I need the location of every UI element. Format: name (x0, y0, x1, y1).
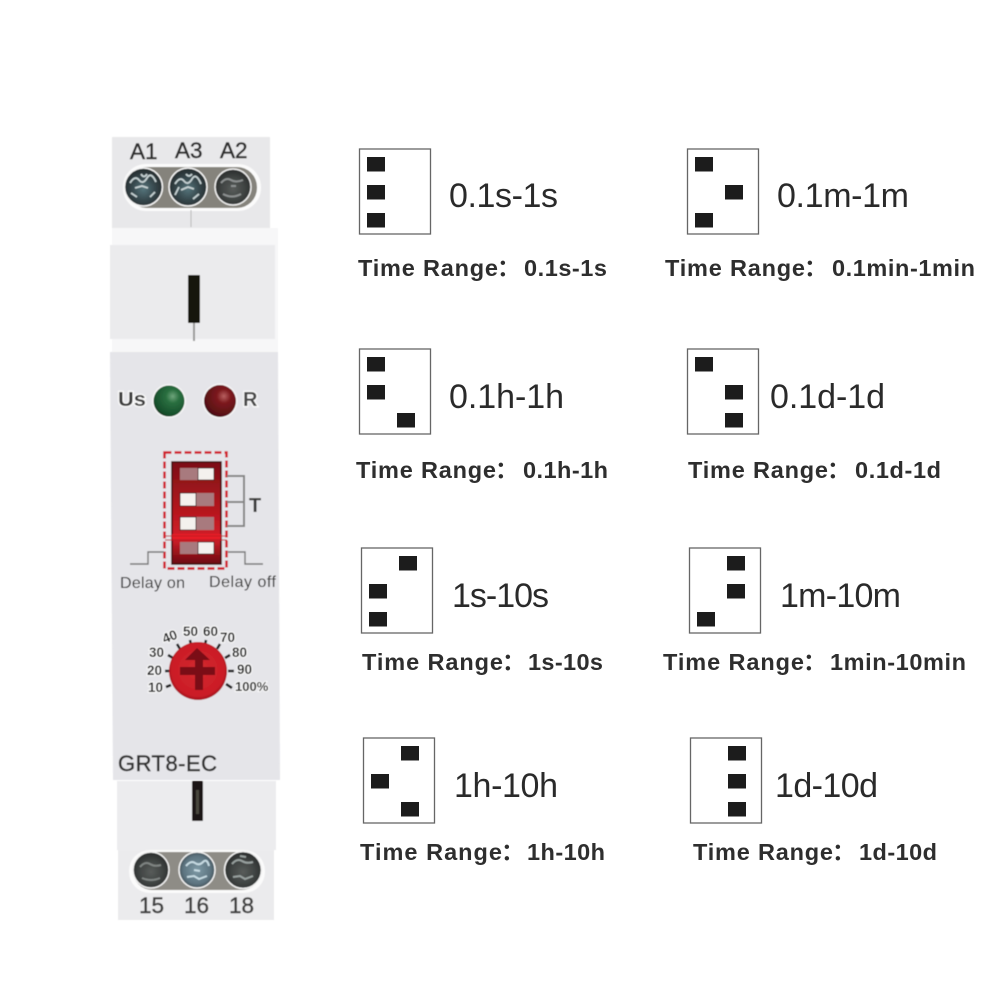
top terminal labels (130, 138, 248, 164)
setting: 0.1d-1d (688, 349, 941, 483)
bottom terminal labels: 16 (184, 893, 209, 918)
timer dial (147, 624, 269, 700)
range caption (358, 255, 607, 281)
status indicators: Us (118, 389, 146, 411)
range caption: Time Range (362, 649, 503, 675)
range caption: 0.1d-1d (855, 457, 941, 483)
range caption (693, 839, 937, 865)
range caption: Time Range (665, 255, 805, 281)
setting: 0.1m-1m (665, 149, 975, 281)
status indicators: R (243, 389, 258, 411)
top terminal labels: A3 (175, 138, 203, 163)
range caption: Time Range (663, 649, 804, 675)
T bracket: T (249, 495, 261, 517)
range caption: ： (495, 457, 518, 483)
dial scale: 20 (147, 663, 162, 678)
delay off waveform and label: Delay off (209, 574, 277, 591)
range value: 1m-10m (780, 577, 901, 615)
top terminal labels: A2 (220, 138, 248, 163)
dial scale: 70 (220, 630, 235, 645)
screw A2 (215, 169, 251, 205)
DIP switch (164, 452, 227, 568)
screw A3 (169, 168, 207, 206)
range caption: 1s-10s (528, 649, 603, 675)
range caption: ： (501, 839, 524, 865)
top terminal block (112, 137, 270, 228)
dial scale: 90 (237, 662, 252, 677)
range caption (362, 649, 603, 675)
range value: 0.1d-1d (770, 378, 885, 416)
range value: 0.1m-1m (777, 177, 909, 215)
range value: 1h-10h (454, 767, 558, 805)
range caption: Time Range (688, 457, 828, 483)
range caption (356, 457, 608, 483)
main front panel (110, 352, 280, 780)
switch diagram (360, 149, 430, 234)
range caption (663, 649, 966, 675)
setting: 1s-10s (362, 548, 603, 675)
range value: 1s-10s (452, 577, 549, 615)
dial scale: 80 (232, 645, 247, 660)
range caption: Time Range (358, 255, 498, 281)
bottom terminal labels: 15 (139, 893, 164, 918)
setting: 1m-10m (663, 548, 966, 675)
dial scale: 30 (149, 645, 164, 660)
dial scale: 40 (160, 627, 180, 646)
screw A1 (124, 168, 162, 206)
range caption: ： (804, 255, 828, 281)
range value: 0.1h-1h (449, 378, 564, 416)
range caption: 1min-10min (830, 649, 966, 675)
range caption: ： (502, 649, 526, 675)
lower cover block (117, 781, 276, 850)
range caption: Time Range (693, 839, 833, 865)
range value: 0.1s-1s (449, 177, 558, 215)
dial scale (147, 624, 269, 695)
status indicators (118, 384, 258, 418)
setting: 1h-10h (360, 738, 605, 865)
range caption (360, 839, 605, 865)
screw 18 (224, 852, 262, 888)
switch diagram (690, 738, 762, 823)
range caption: ： (497, 255, 520, 281)
range caption (688, 457, 941, 483)
switch diagram (360, 349, 430, 434)
setting: 0.1s-1s (358, 149, 607, 281)
dial knob (169, 642, 227, 700)
range caption: Time Range (356, 457, 496, 483)
dial scale: 10 (148, 680, 163, 695)
bottom terminal block (118, 850, 274, 920)
switch diagram (362, 548, 432, 633)
upper cover block (110, 245, 275, 341)
range caption: 0.1min-1min (832, 255, 975, 281)
range caption: ： (803, 649, 826, 675)
switch diagram (690, 548, 760, 633)
range caption: 0.1h-1h (523, 457, 608, 483)
setting: 1d-10d (690, 738, 937, 865)
range caption: ： (827, 457, 850, 483)
range caption: 0.1s-1s (524, 255, 607, 281)
dial scale: 50 (183, 624, 198, 639)
delay on waveform and label (120, 552, 185, 592)
bottom terminal labels: 18 (229, 893, 254, 918)
top terminal labels: A1 (130, 139, 158, 164)
delay off waveform and label (209, 552, 277, 591)
model name: GRT8-EC (118, 751, 217, 776)
range caption: ： (832, 839, 856, 865)
dial scale: 100% (235, 679, 269, 694)
setting: 0.1h-1h (356, 349, 608, 483)
screw 16 (179, 852, 215, 888)
range caption: Time Range (360, 839, 502, 865)
delay on waveform and label: Delay on (120, 575, 185, 592)
switch diagram (688, 149, 758, 234)
T bracket (227, 476, 261, 526)
switch diagram (364, 738, 434, 823)
bottom terminal labels (139, 893, 254, 918)
range caption (665, 255, 975, 281)
dial scale: 60 (203, 624, 218, 639)
range caption: 1d-10d (859, 839, 937, 865)
range caption: 1h-10h (527, 839, 605, 865)
range value: 1d-10d (775, 767, 878, 805)
body backing strip (112, 228, 278, 352)
screw 15 (133, 852, 169, 888)
switch diagram (688, 349, 758, 434)
relay device (110, 137, 280, 920)
